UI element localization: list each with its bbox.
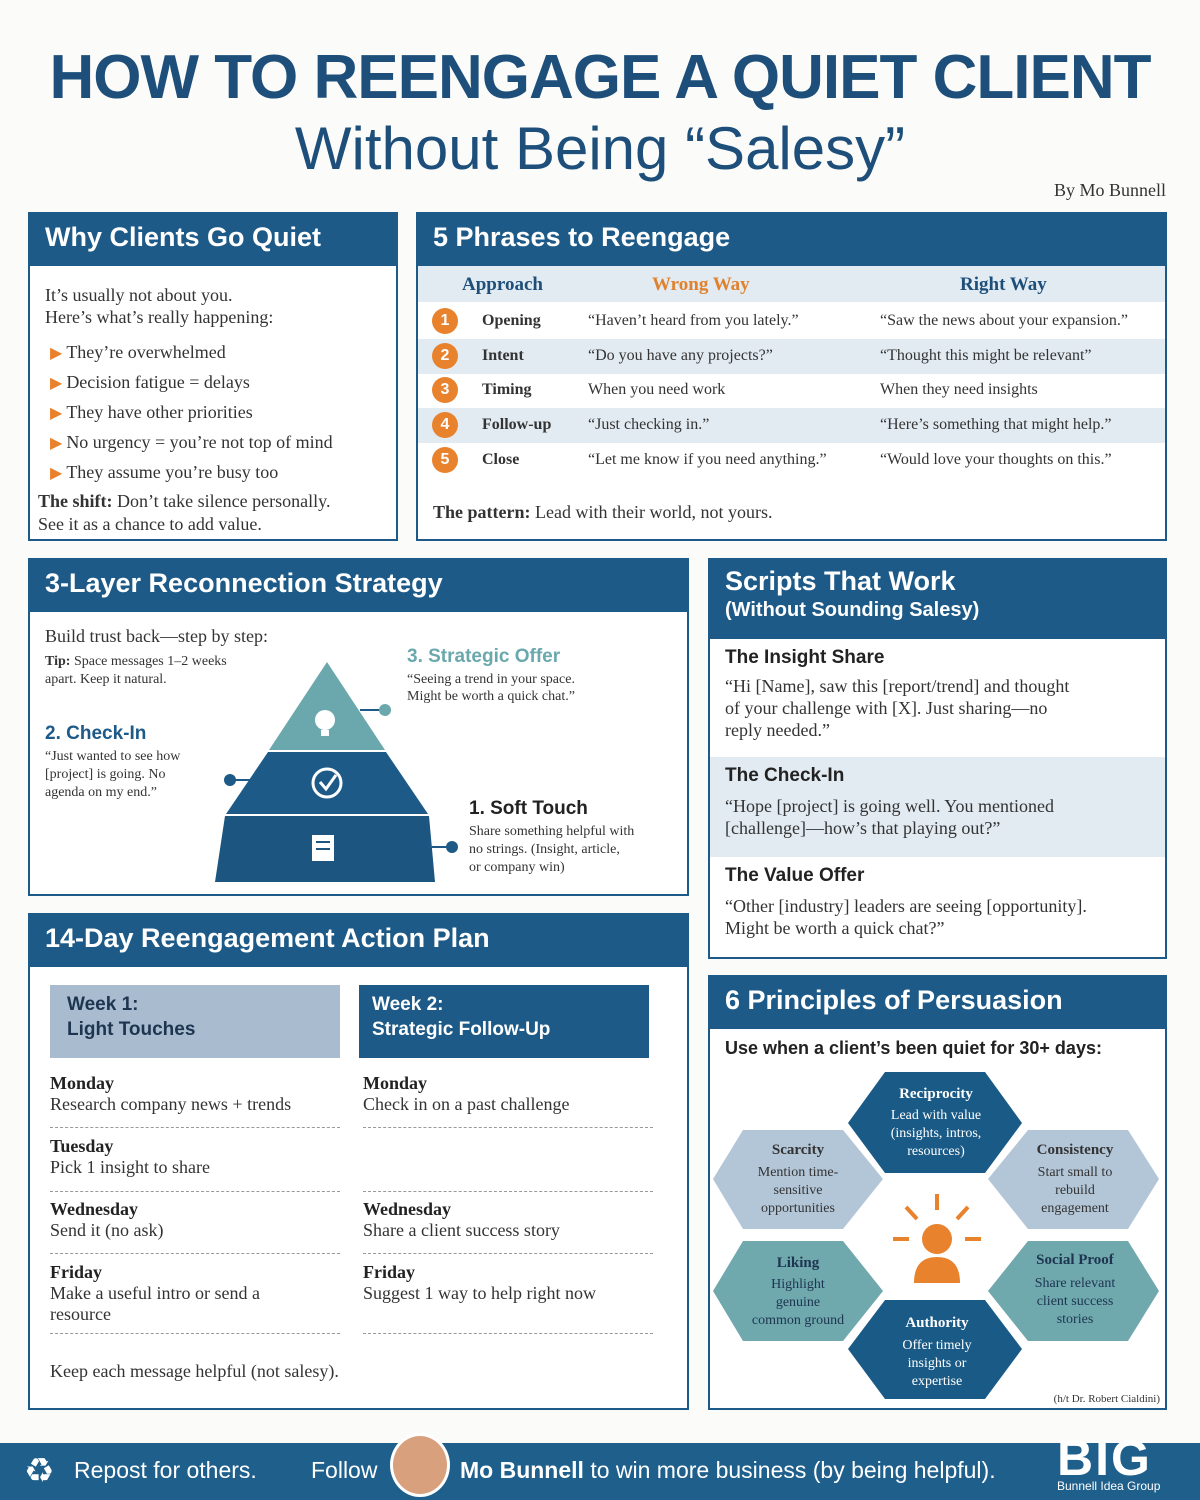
- script: value offer: “Other [industry] leaders are seeing [opportunity]. Might be worth a quick chat?”: [725, 896, 1087, 938]
- week 2 header: [359, 985, 649, 1058]
- heading: (Without Sounding Salesy): [725, 599, 979, 621]
- script: check-in: [710, 757, 1165, 857]
- tip: Tip: Space messages 1–2 weeks: [45, 654, 227, 669]
- week 2 header: Week 2:: [372, 994, 443, 1015]
- hexagon diagram: Highlight: [771, 1277, 825, 1292]
- reasons list: ▶No urgency = you’re not top of mind: [50, 432, 333, 452]
- heading: 5 Phrases to Reengage: [433, 222, 730, 252]
- hexagon diagram: Share relevant: [1035, 1276, 1115, 1291]
- icon: recycle: ♻: [24, 1452, 54, 1490]
- hexagon diagram: Consistency: [1037, 1142, 1114, 1158]
- subtitle: Without Being “Salesy”: [295, 115, 905, 182]
- panel: 14-day plan: Make a useful intro or send a: [50, 1283, 260, 1303]
- table: “Here’s something that might help.”: [880, 416, 1112, 433]
- panel: why clients go quiet: [28, 212, 398, 541]
- follow text: Follow: [311, 1457, 377, 1483]
- table: 3: [441, 381, 449, 398]
- week 1 header: Light Touches: [67, 1019, 195, 1040]
- layer 1: or company win): [469, 860, 565, 875]
- panel: 14-day plan: [28, 913, 689, 1410]
- hexagon diagram: common ground: [752, 1313, 844, 1328]
- panel: scripts that work: [708, 558, 1167, 959]
- cta text: Mo Bunnell to win more business (by being helpful).: [460, 1457, 996, 1483]
- layer 3: Might be worth a quick chat.”: [407, 689, 575, 704]
- intro text: [45, 285, 273, 327]
- table: Follow-up: [482, 416, 551, 433]
- reasons list: ▶They’re overwhelmed: [50, 342, 226, 362]
- week 1 days: Monday: [50, 1073, 114, 1093]
- table: When you need work: [588, 381, 725, 398]
- panel: 14-day plan: Tuesday: [50, 1136, 113, 1156]
- layer 2: agenda on my end.”: [45, 785, 157, 800]
- table: 2: [441, 347, 449, 364]
- panel: 14-day plan: Friday: [363, 1262, 415, 1282]
- week 2 days: Monday: [363, 1073, 427, 1093]
- pattern text: The pattern: Lead with their world, not yours.: [433, 502, 772, 522]
- panel: 14-day plan: Send it (no ask): [50, 1220, 163, 1240]
- layer 2: [45, 723, 180, 800]
- heading: 14-Day Reengagement Action Plan: [45, 923, 490, 953]
- hexagon diagram: Liking: [777, 1255, 820, 1271]
- hexagon diagram: stories: [1057, 1312, 1093, 1327]
- panel: 14-day plan: Share a client success story: [363, 1220, 560, 1240]
- table: “Saw the news about your expansion.”: [880, 312, 1128, 329]
- footer bar: [0, 1443, 1200, 1500]
- panel: 14-day plan: Pick 1 insight to share: [50, 1157, 210, 1177]
- week 2 header: Strategic Follow-Up: [372, 1019, 550, 1040]
- hexagon diagram: rebuild: [1055, 1183, 1095, 1198]
- week 1 header: [50, 985, 340, 1058]
- table: Approach: [462, 274, 543, 295]
- table: Opening: [482, 312, 541, 329]
- script: insight share: The Insight Share: [725, 647, 884, 668]
- table: Intent: [482, 347, 524, 364]
- pyramid: [215, 662, 458, 882]
- footer bar: Bunnell Idea Group: [1057, 1479, 1160, 1493]
- title: HOW TO REENGAGE A QUIET CLIENT: [50, 43, 1150, 112]
- week 2 days: [363, 1073, 653, 1334]
- layer 3: “Seeing a trend in your space.: [407, 672, 575, 687]
- heading: 6 Principles of Persuasion: [725, 985, 1063, 1015]
- table: 4: [441, 416, 449, 433]
- table: “Haven’t heard from you lately.”: [588, 312, 799, 329]
- shift text: See it as a chance to add value.: [38, 514, 262, 534]
- hexagon diagram: Authority: [905, 1315, 969, 1331]
- hexagon diagram: (insights, intros,: [891, 1126, 981, 1141]
- hexagon diagram: client success: [1037, 1294, 1113, 1309]
- hexagon diagram: (h/t Dr. Robert Cialdini): [1054, 1393, 1160, 1405]
- table: When they need insights: [880, 381, 1038, 398]
- hexagon diagram: Scarcity: [772, 1142, 825, 1158]
- hexagon diagram: Start small to: [1038, 1165, 1112, 1180]
- reasons list: ▶Decision fatigue = delays: [50, 372, 250, 392]
- intro text: It’s usually not about you.: [45, 285, 232, 305]
- week 1 days: [50, 1073, 340, 1334]
- table: “Would love your thoughts on this.”: [880, 451, 1112, 468]
- layer 2: 2. Check-In: [45, 723, 146, 744]
- table: “Just checking in.”: [588, 416, 709, 433]
- heading: [30, 214, 396, 266]
- avatar: [390, 1433, 450, 1497]
- hexagon diagram: Reciprocity: [899, 1086, 973, 1102]
- panel: 5 phrases: [416, 212, 1167, 541]
- heading: Why Clients Go Quiet: [45, 222, 321, 252]
- table: Right Way: [960, 274, 1047, 295]
- layer 3: [407, 646, 575, 704]
- layer 1: [469, 798, 634, 875]
- reasons list: ▶They assume you’re busy too: [50, 462, 278, 482]
- panel: 14-day plan: Wednesday: [363, 1199, 451, 1219]
- intro: Use when a client’s been quiet for 30+ days:: [725, 1038, 1102, 1058]
- script: check-in: The Check-In: [725, 765, 844, 786]
- hexagon diagram: resources): [907, 1144, 965, 1159]
- heading: Scripts That Work: [725, 566, 956, 596]
- hexagon diagram: expertise: [912, 1374, 962, 1389]
- script: value offer: The Value Offer: [725, 865, 864, 886]
- hexagon diagram: Social Proof: [1036, 1252, 1115, 1268]
- heading: [710, 560, 1165, 639]
- intro text: Here’s what’s really happening:: [45, 307, 273, 327]
- table: Timing: [482, 381, 532, 398]
- hexagon diagram: [713, 1072, 1160, 1405]
- hexagon diagram: genuine: [776, 1295, 820, 1310]
- table: Close: [482, 451, 519, 468]
- repost text: Repost for others.: [74, 1457, 257, 1483]
- hexagon diagram: sensitive: [774, 1183, 822, 1198]
- table: [418, 266, 1165, 473]
- table: “Do you have any projects?”: [588, 347, 773, 364]
- panel: 14-day plan: resource: [50, 1304, 111, 1324]
- hexagon diagram: Lead with value: [891, 1108, 981, 1123]
- layer 3: 3. Strategic Offer: [407, 646, 560, 667]
- shift text: [38, 491, 330, 534]
- layer 2: “Just wanted to see how: [45, 749, 180, 764]
- panel: 6 principles: [708, 975, 1167, 1410]
- panel: 14-day plan: Wednesday: [50, 1199, 138, 1219]
- footer note: Keep each message helpful (not salesy).: [50, 1361, 339, 1381]
- layer 1: no strings. (Insight, article,: [469, 842, 620, 857]
- shift text: The shift: Don’t take silence personally.: [38, 491, 330, 511]
- heading: [710, 977, 1165, 1029]
- week 1 header: Week 1:: [67, 994, 138, 1015]
- byline: By Mo Bunnell: [1054, 180, 1166, 200]
- table: Wrong Way: [652, 274, 750, 295]
- script: value offer: [725, 865, 1087, 938]
- hexagon diagram: engagement: [1041, 1201, 1109, 1216]
- layer 1: Share something helpful with: [469, 824, 634, 839]
- hexagon diagram: insights or: [908, 1356, 967, 1371]
- table: “Let me know if you need anything.”: [588, 451, 827, 468]
- script: insight share: “Hi [Name], saw this [report/trend] and thought of your challenge with [X]. Just sharing—no reply needed.”: [725, 676, 1069, 740]
- hexagon diagram: Offer timely: [902, 1338, 972, 1353]
- panel: 14-day plan: Suggest 1 way to help right now: [363, 1283, 596, 1303]
- panel: 3-layer strategy: [28, 558, 689, 896]
- table: 1: [441, 312, 449, 329]
- heading: [418, 214, 1165, 266]
- reasons list: ▶They have other priorities: [50, 402, 253, 422]
- intro: Build trust back—step by step:: [45, 626, 268, 646]
- script: check-in: “Hope [project] is going well. You mentioned [challenge]—how’s that playing out?”: [725, 796, 1054, 838]
- script: insight share: [725, 647, 1070, 740]
- heading: [30, 560, 687, 612]
- week 2 days: Check in on a past challenge: [363, 1094, 569, 1114]
- hexagon diagram: Mention time-: [758, 1165, 839, 1180]
- layer 1: 1. Soft Touch: [469, 798, 588, 819]
- tip: apart. Keep it natural.: [45, 672, 167, 687]
- hexagon diagram: opportunities: [761, 1201, 835, 1216]
- table: “Thought this might be relevant”: [880, 347, 1092, 364]
- tip: [45, 654, 227, 687]
- panel: 14-day plan: Friday: [50, 1262, 102, 1282]
- week 1 days: Research company news + trends: [50, 1094, 291, 1114]
- heading: 3-Layer Reconnection Strategy: [45, 568, 443, 598]
- reasons list: [50, 342, 333, 482]
- logo: BIG: [1057, 1430, 1152, 1486]
- heading: [30, 915, 687, 967]
- layer 2: [project] is going. No: [45, 767, 166, 782]
- table: 5: [441, 451, 449, 468]
